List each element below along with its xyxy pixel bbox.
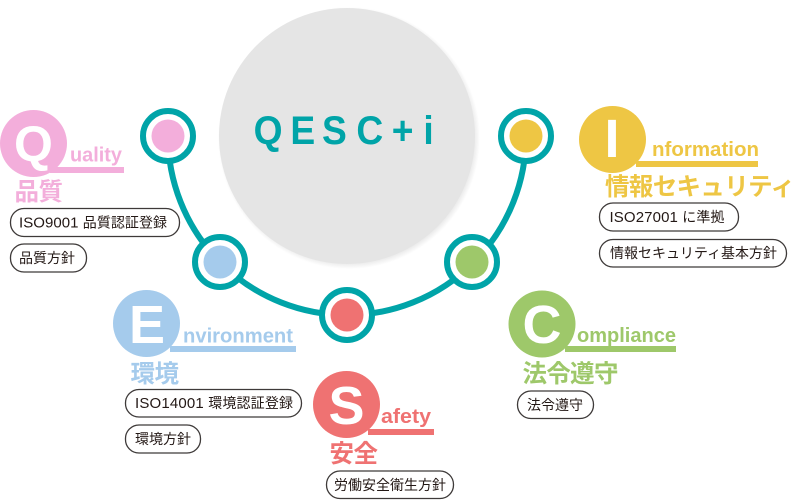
pill: ISO9001: ISO9001 品質認証登録 — [19, 214, 167, 232]
pill: 法令遵守: 法令遵守 — [527, 397, 583, 413]
panel: quality — [0, 110, 180, 272]
node: environment — [195, 237, 245, 287]
panel: environment — [113, 290, 302, 453]
pill: 品質方針: 品質方針 — [19, 250, 75, 266]
heading: 環境: 環境 — [130, 360, 180, 388]
badge: I: I — [604, 109, 620, 169]
teal arc connector — [168, 136, 526, 315]
pill: ISO14001: ISO14001 環境認証登録 — [135, 395, 293, 412]
label: Information: nformation — [652, 139, 759, 161]
badge: E: E — [129, 295, 165, 355]
badge: S: S — [328, 376, 365, 436]
pill: ISO9001 — [10, 208, 180, 236]
badge: C — [508, 290, 676, 358]
pill: ISO27001 — [600, 203, 738, 231]
pill: ISO27001: ISO27001 に準拠 — [610, 209, 724, 226]
label: Quality: uality — [70, 144, 123, 166]
pill: ISO14001 — [126, 390, 302, 417]
heading: 安全: 安全 — [330, 440, 378, 468]
node: compliance — [447, 237, 497, 287]
pill: 環境方針: 環境方針 — [135, 431, 191, 447]
node: quality — [143, 111, 193, 161]
label: Environment: nvironment — [183, 326, 293, 348]
pill: 情報セキュリティ基本方針: 情報セキュリティ基本方針 — [610, 245, 777, 261]
pill: 情報セキュリティ基本方針 — [600, 240, 786, 267]
central circle: QESC+i — [218, 7, 480, 269]
pill: 労働安全衛生方針: 労働安全衛生方針 — [334, 477, 446, 493]
heading: 品質: 品質 — [14, 178, 63, 206]
label: Compliance: ompliance — [577, 325, 676, 347]
badge: S — [313, 371, 434, 438]
badge: I — [579, 106, 758, 173]
heading: 情報セキュリティ: 情報セキュリティ — [605, 173, 793, 201]
pill: 労働安全衛生方針 — [326, 471, 454, 498]
central title: QESC+i — [254, 109, 434, 153]
panel: safety — [313, 371, 454, 498]
heading: 法令遵守: 法令遵守 — [522, 360, 618, 388]
badge: E — [113, 290, 296, 357]
pill: 環境方針 — [126, 425, 200, 453]
panel: information — [579, 106, 793, 267]
pill: 品質方針 — [10, 244, 86, 272]
badge: Q: Q — [14, 116, 53, 172]
node: information — [501, 111, 551, 161]
pill: 法令遵守 — [518, 391, 594, 418]
badge: Q — [0, 110, 124, 177]
panel: compliance — [508, 290, 676, 418]
badge: C: C — [522, 295, 562, 355]
node: safety — [322, 290, 372, 340]
label: Safety: afety — [381, 406, 432, 428]
